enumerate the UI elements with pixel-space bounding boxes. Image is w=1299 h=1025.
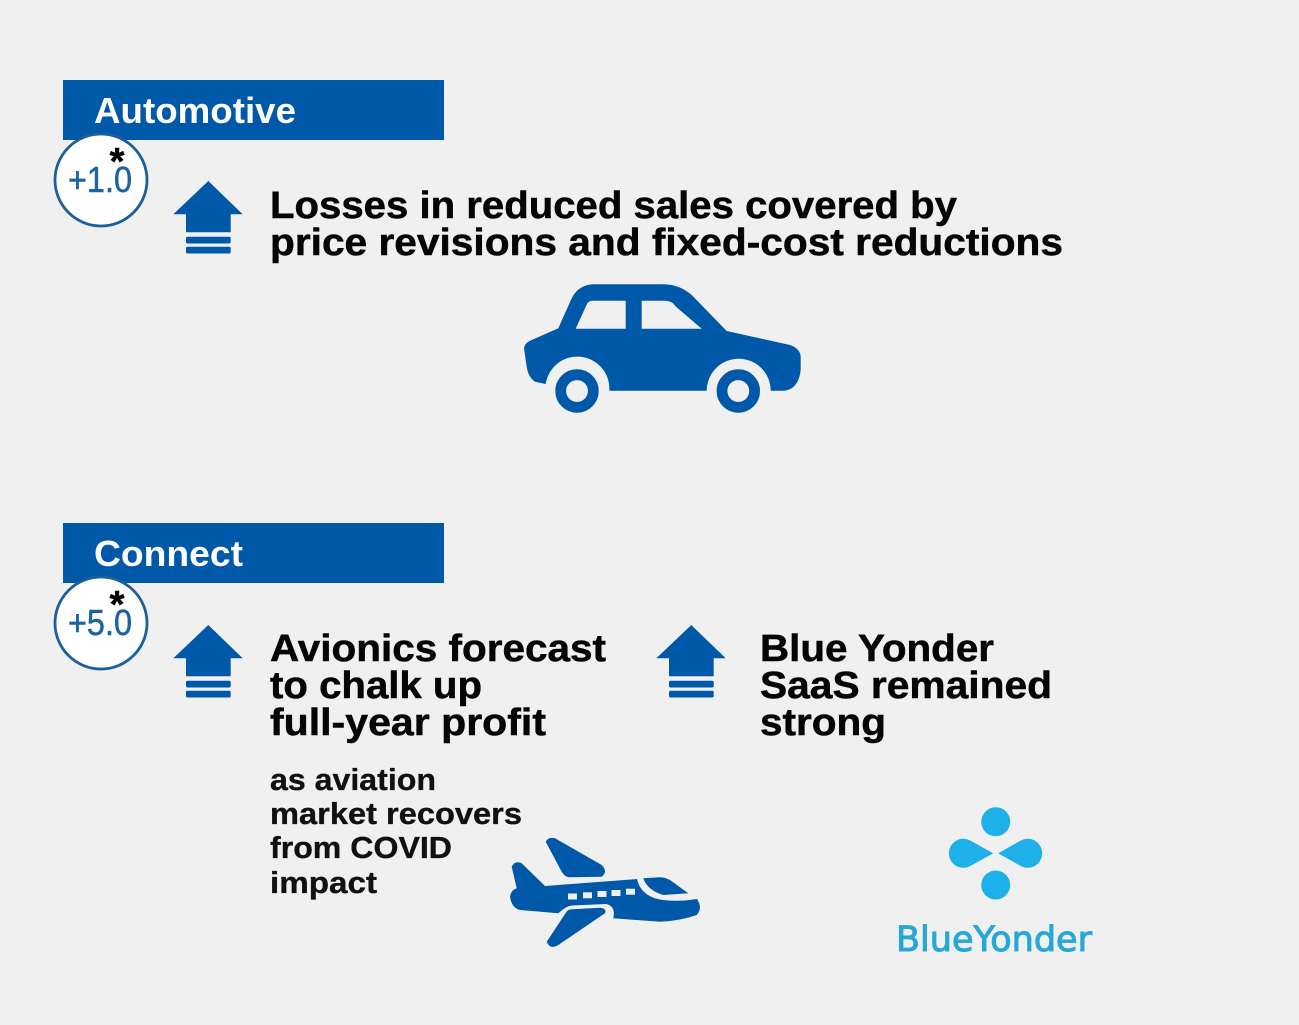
icon: up arrow avionics: [173, 625, 243, 698]
heading: connect: Connect: [94, 533, 243, 574]
badge: +1.0: *: [110, 141, 125, 183]
text: avionics statement: to chalk up: [270, 665, 482, 707]
text: automotive statement: [270, 185, 1063, 264]
icon: car: [524, 284, 801, 407]
text: avionics statement: full-year profit: [270, 702, 546, 744]
text: blue yonder statement: SaaS remained: [760, 665, 1052, 707]
text: avionics statement: [270, 628, 606, 744]
text: avionics detail: as aviation: [270, 763, 436, 797]
badge: +5.0: [55, 577, 147, 669]
text: avionics detail: impact: [270, 866, 377, 900]
text: blue yonder statement: [760, 628, 1052, 744]
badge: +5.0: +5.0: [68, 602, 132, 643]
logo wordmark: BlueYonder: [896, 920, 1093, 960]
heading: automotive: [63, 80, 444, 140]
text: avionics statement: Avionics forecast: [270, 628, 606, 670]
text: avionics detail: from COVID: [270, 831, 452, 865]
badge: +5.0: *: [110, 584, 125, 626]
heading: automotive: Automotive: [94, 90, 296, 131]
icon: airplane: [510, 838, 700, 947]
text: avionics detail: [270, 763, 522, 900]
panel: automotive: [55, 80, 1063, 407]
heading: connect: [63, 523, 444, 583]
text: blue yonder statement: strong: [760, 702, 886, 744]
logo mark: [949, 807, 1042, 900]
badge: +1.0: +1.0: [68, 159, 132, 200]
text: blue yonder statement: Blue Yonder: [760, 628, 994, 670]
text: automotive statement: Losses in reduced sales covered by: [270, 185, 957, 227]
text: automotive statement: price revisions and fixed-cost reductions: [270, 222, 1063, 264]
badge: +1.0: [55, 134, 147, 226]
text: avionics detail: market recovers: [270, 797, 522, 831]
icon: up arrow blue yonder: [656, 625, 726, 698]
icon: up arrow: [173, 181, 243, 254]
panel: connect: [55, 523, 1093, 960]
logo: blue yonder: [896, 807, 1093, 960]
